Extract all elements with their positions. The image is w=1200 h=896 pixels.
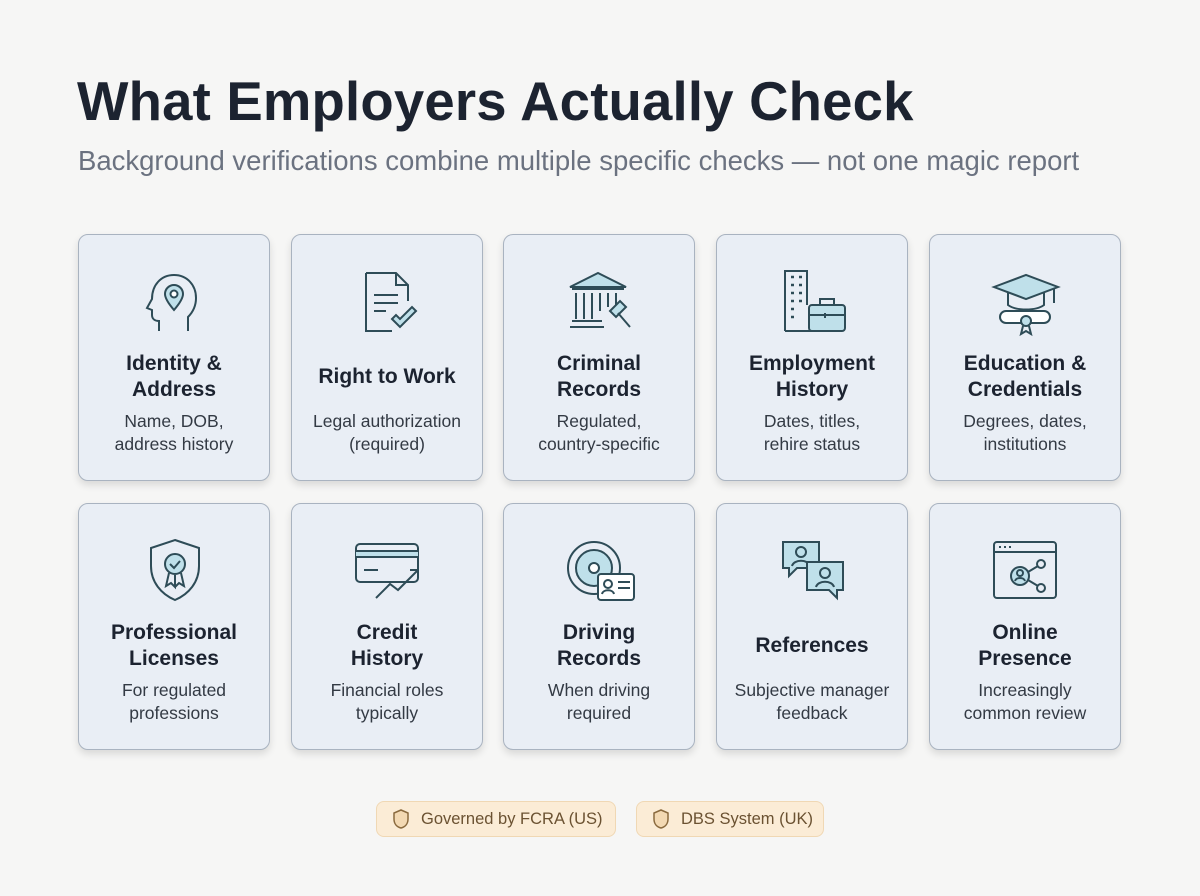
card: education [929,234,1121,481]
card: employment: Employment [749,352,875,375]
badge: FCRA: Governed by FCRA (US) [421,810,603,828]
card: employment: Dates, titles, [764,411,860,431]
card: licenses: For regulated [122,680,226,700]
card: employment: rehire status [764,434,860,454]
badge: FCRA [376,801,616,837]
card: education: Credentials [968,378,1082,401]
card: credit: History [351,647,423,670]
card: right to work: Legal authorization [313,411,461,431]
card: online: Presence [978,647,1072,670]
card: employment [716,234,908,481]
card: licenses: professions [129,703,219,723]
card: driving: When driving [548,680,650,700]
card: right to work: Right to Work [318,365,456,388]
card: online: common review [964,703,1086,723]
subtitle: Background verifications combine multiple specific checks — not one magic report [78,145,1079,176]
card: driving [503,503,695,750]
card: driving: required [567,703,631,723]
card: licenses [78,503,270,750]
card: criminal: Records [557,378,641,401]
card: online [929,503,1121,750]
badge: DBS: DBS System (UK) [681,810,813,828]
card: credit [291,503,483,750]
card: credit: typically [356,703,418,723]
card: references: References [755,634,869,657]
card: identity: Identity & [126,352,222,375]
card: online: Online [992,621,1058,644]
card: credit: Credit [357,621,417,644]
title: What Employers Actually Check [77,71,914,132]
card: criminal: Criminal [557,352,641,375]
card: licenses: Licenses [129,647,219,670]
icon: head with pin [146,274,197,331]
icon: steering wheel id card [567,541,635,601]
card: licenses: Professional [111,621,237,644]
badge: DBS [636,801,824,837]
card: criminal: country-specific [538,434,660,454]
card: criminal [503,234,695,481]
card: identity: Address [132,378,216,401]
icon: document check [365,272,418,332]
card: education: institutions [984,434,1066,454]
card: identity: address history [115,434,233,454]
icon: courthouse gavel [570,272,631,328]
card: credit: Financial roles [331,680,443,700]
card: right to work: (required) [349,434,425,454]
card: identity [78,234,270,481]
icon: speech bubbles people [782,541,844,600]
icon: building and briefcase [784,270,846,332]
card: right to work [291,234,483,481]
card: education: Degrees, dates, [963,411,1087,431]
icon: grad cap diploma [991,274,1061,336]
card: references [716,503,908,750]
card: driving: Driving [563,621,635,644]
card: criminal: Regulated, [557,411,641,431]
icon: shield badge [150,539,200,602]
card: references: feedback [776,703,848,723]
card: education: Education & [964,352,1086,375]
card: online: Increasingly [978,680,1072,700]
card: identity: Name, DOB, [124,411,224,431]
card: driving: Records [557,647,641,670]
card: references: Subjective manager [735,680,889,700]
icon: card and trend [355,543,419,599]
card: employment: History [776,378,848,401]
icon: browser share [993,541,1057,599]
